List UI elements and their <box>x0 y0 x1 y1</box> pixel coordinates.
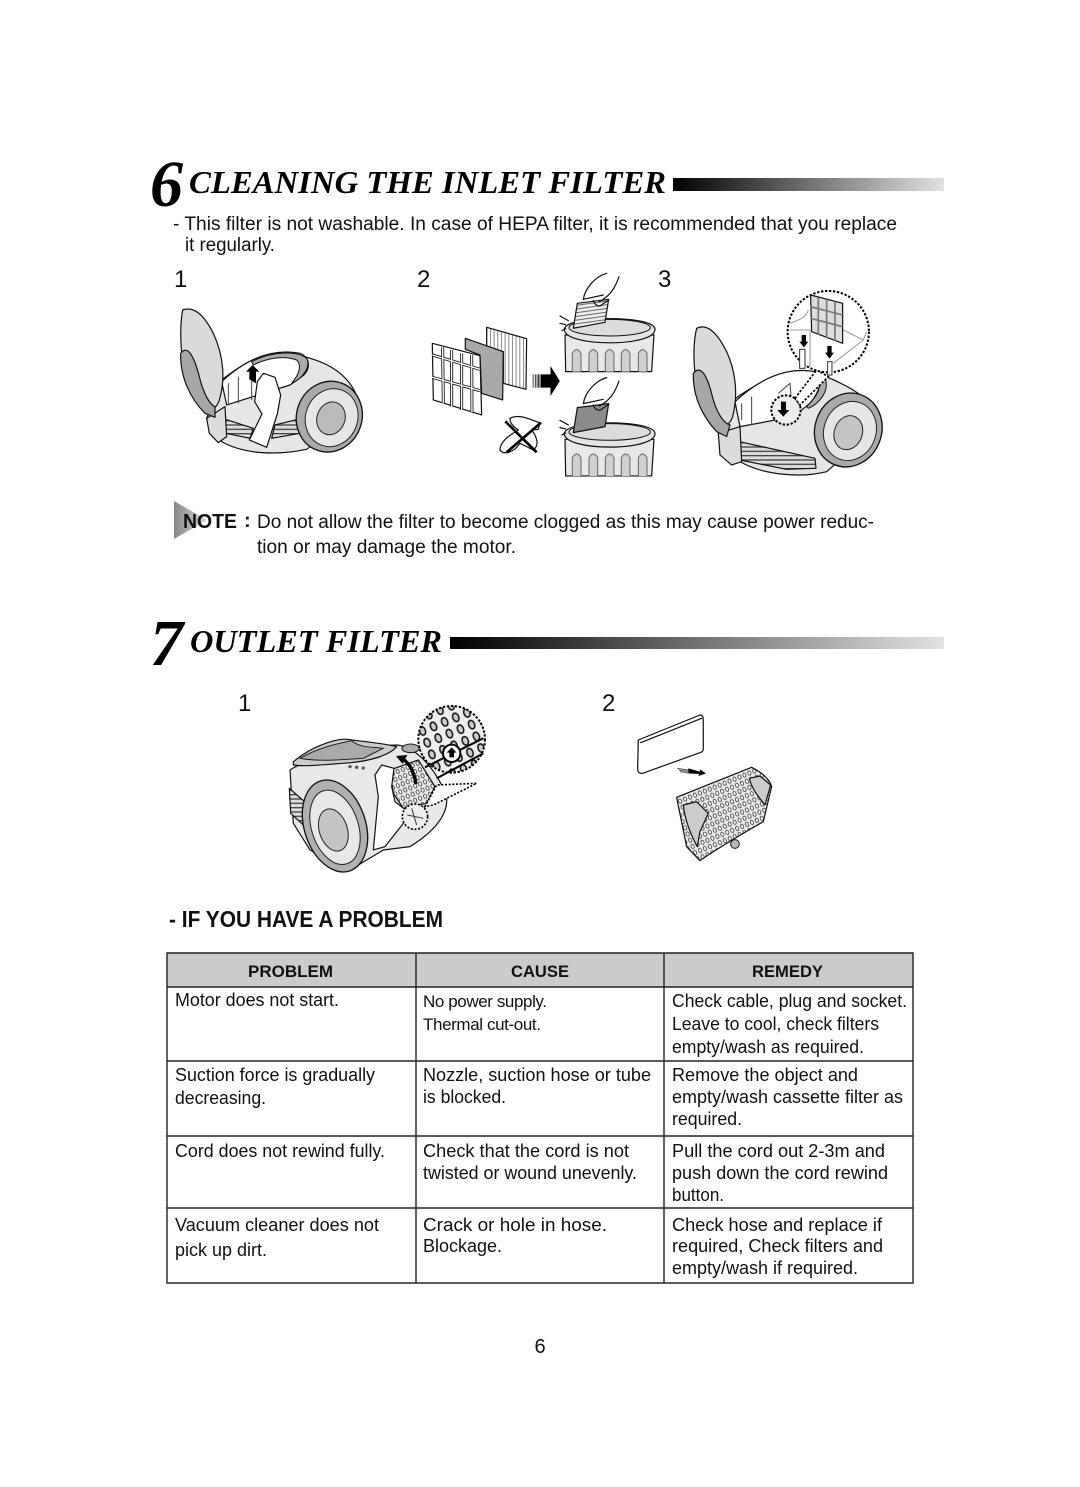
table header row: CAUSE <box>511 962 569 981</box>
row: cord does not rewind <box>175 1141 888 1205</box>
magnified holes <box>418 706 485 773</box>
subheading: if you have a problem: - IF YOU HAVE A PROBLEM <box>169 906 443 932</box>
row: does not pick up dirt: empty/wash if required. <box>672 1258 858 1278</box>
bin lower with dark filter <box>560 378 655 476</box>
row: suction force: is blocked. <box>423 1087 506 1107</box>
row: motor does not start: empty/wash as required. <box>672 1037 864 1057</box>
row: cord does not rewind: Pull the cord out 2-3m and <box>672 1141 885 1161</box>
row: cord does not rewind: twisted or wound unevenly. <box>423 1163 637 1183</box>
row: does not pick up dirt: Blockage. <box>423 1236 502 1256</box>
heading: section 6 <box>150 148 944 221</box>
step numbers for section 7 <box>238 690 615 717</box>
grille plate <box>677 767 772 861</box>
gradient bar <box>450 637 944 649</box>
title: cleaning the inlet filter: CLEANING THE INLET FILTER <box>189 164 666 200</box>
filter pad <box>638 715 703 773</box>
step numbers for section 6: 3 <box>658 266 671 293</box>
note label: NOTE <box>183 511 237 533</box>
wheel <box>291 771 379 880</box>
wheel <box>286 372 372 461</box>
row: motor does not start: Motor does not start. <box>175 990 339 1010</box>
section number 7: 7 <box>150 607 186 680</box>
row: suction force <box>175 1065 903 1129</box>
row: does not pick up dirt: Check hose and replace if <box>672 1215 883 1235</box>
step numbers for section 6 <box>174 266 671 293</box>
note text: Do not allow the filter to become clogged as this may cause power reduc- <box>257 512 874 533</box>
small dashed circle <box>402 804 428 829</box>
row: motor does not start: Check cable, plug and socket. <box>672 991 907 1011</box>
grille <box>390 760 435 808</box>
table header row: PROBLEM <box>248 962 333 981</box>
arrow <box>688 768 706 776</box>
lid <box>694 327 736 425</box>
instruction text: - This filter is not washable. In case of HEPA filter, it is recommended that you replace <box>173 214 897 235</box>
do not wash icon <box>500 417 541 453</box>
note label: : <box>244 510 251 532</box>
row: suction force: decreasing. <box>175 1088 266 1108</box>
illustration: outlet filter step 2 filter and grille <box>638 715 772 861</box>
illustration: outlet filter step 1 opening grille <box>289 706 485 880</box>
arrow right <box>532 366 560 396</box>
filter parts exploded <box>432 327 527 415</box>
row: cord does not rewind: Cord does not rewind fully. <box>175 1141 385 1161</box>
arrow curved <box>402 758 416 784</box>
row: motor does not start <box>175 990 907 1057</box>
wheel <box>804 384 892 476</box>
row: suction force: Suction force is gradually <box>175 1065 375 1085</box>
step numbers for section 6: 1 <box>174 266 187 293</box>
row: cord does not rewind: Check that the cord is not <box>423 1141 629 1161</box>
troubleshooting table <box>167 953 913 1283</box>
magnifier <box>771 395 801 425</box>
table header row: REMEDY <box>752 962 824 981</box>
row: does not pick up dirt: Vacuum cleaner does not <box>175 1215 379 1235</box>
note triangle <box>174 501 207 539</box>
hand <box>373 765 410 850</box>
heading: section 7 <box>150 607 944 680</box>
instruction text <box>173 214 897 256</box>
page number: 6 <box>534 1336 546 1358</box>
lid <box>181 309 223 409</box>
step numbers for section 7: 1 <box>238 690 251 717</box>
row: suction force: empty/wash cassette filter as <box>672 1087 903 1107</box>
connector <box>425 783 477 807</box>
row: cord does not rewind: push down the cord rewind <box>672 1163 888 1183</box>
illustration: step 3 reinserting filter into vacuum <box>693 291 892 476</box>
title: outlet filter: OUTLET FILTER <box>190 623 442 659</box>
row: does not pick up dirt <box>175 1215 883 1278</box>
table grid <box>167 953 913 1283</box>
row: cord does not rewind: button. <box>672 1185 724 1205</box>
step numbers for section 6: 2 <box>417 266 430 293</box>
row: does not pick up dirt: pick up dirt. <box>175 1240 267 1260</box>
note text <box>257 512 874 558</box>
table header row <box>167 953 913 987</box>
gradient bar <box>673 178 944 191</box>
row: motor does not start: Thermal cut-out. <box>423 1015 541 1034</box>
row: does not pick up dirt: Crack or hole in hose. <box>423 1215 607 1235</box>
row: suction force: Remove the object and <box>672 1065 858 1085</box>
step numbers for section 7: 2 <box>602 690 615 717</box>
row: suction force: Nozzle, suction hose or tube <box>423 1065 651 1085</box>
instruction text: it regularly. <box>185 235 275 256</box>
illustration: step 2 filter parts, do not wash, bins <box>432 273 655 476</box>
section number 6: 6 <box>150 148 183 221</box>
row: suction force: required. <box>672 1109 742 1129</box>
row: does not pick up dirt: required, Check filters and <box>672 1236 883 1256</box>
illustration: step 1 lifting filter out of vacuum <box>181 309 372 461</box>
row: motor does not start: No power supply. <box>423 992 547 1011</box>
row: motor does not start: Leave to cool, check filters <box>672 1014 879 1034</box>
grille tabs <box>683 802 708 847</box>
note block <box>174 501 874 558</box>
note text: tion or may damage the motor. <box>257 537 516 558</box>
hand <box>249 373 281 447</box>
bin upper with pleated filter <box>560 273 655 372</box>
arrow <box>246 365 259 383</box>
